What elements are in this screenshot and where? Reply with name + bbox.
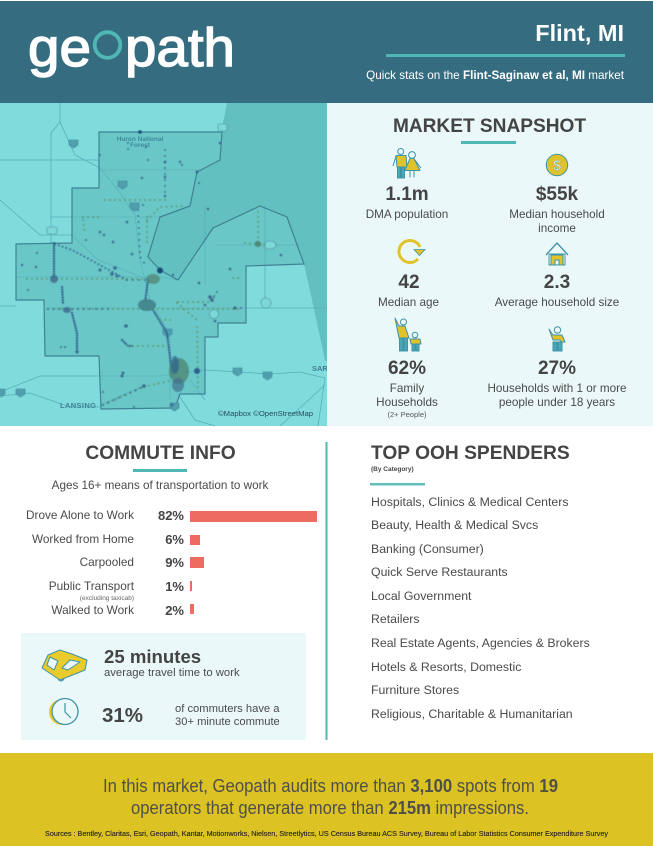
category list: Hotels & Resorts, Domestic — [371, 660, 521, 674]
map labels: SAR — [312, 364, 328, 373]
bar chart: 82% — [158, 508, 184, 523]
stat: family households: 62% — [388, 358, 426, 379]
stat: households with children: people under 18 years — [499, 396, 615, 409]
geopath logo: path — [125, 18, 235, 78]
geopath logo — [28, 18, 235, 78]
category list: Retailers — [371, 612, 420, 626]
stat: households with children: 27% — [538, 358, 576, 379]
stat: median age: 42 — [398, 272, 420, 293]
bar chart: 1% — [165, 579, 184, 594]
bar chart: 9% — [165, 555, 184, 570]
bar chart: Carpooled — [80, 555, 134, 569]
bar chart: (excluding taxicab) — [80, 595, 134, 602]
map labels: Forest — [130, 142, 151, 149]
map labels — [60, 136, 328, 418]
stat: median age — [378, 272, 439, 309]
stat: household size: Average household size — [495, 296, 619, 309]
subheading: Ages 16+ means of transportation to work — [52, 479, 268, 492]
stat: income: income — [538, 222, 576, 235]
map labels: ©Mapbox ©OpenStreetMap — [218, 409, 313, 418]
category list: Hospitals, Clinics & Medical Centers — [371, 495, 569, 509]
stat: income — [509, 184, 605, 235]
DMA region — [16, 132, 304, 409]
bar chart — [26, 508, 317, 618]
map labels: Huron National — [117, 136, 163, 143]
stat: income: Median household — [509, 208, 605, 221]
bar chart: 2% — [165, 603, 184, 618]
heading: TOP OOH SPENDERS — [371, 443, 570, 464]
icon: parent and child — [395, 318, 421, 351]
stat: population: DMA population — [366, 208, 448, 221]
stat: households with children: Households with 1 or more — [487, 382, 627, 395]
panel: market snapshot — [327, 103, 653, 426]
icon: couple — [393, 148, 421, 178]
category list: Beauty, Health & Medical Svcs — [371, 518, 538, 532]
map labels: LANSING — [60, 401, 96, 410]
bar chart: Drove Alone to Work — [26, 508, 134, 522]
icon: child — [549, 327, 565, 351]
bar chart: Public Transport — [49, 579, 135, 593]
icon: cycle arrow — [399, 240, 425, 262]
footer banner — [0, 753, 653, 846]
map panel — [0, 103, 328, 426]
icon: dollar coin — [546, 154, 568, 176]
long commute share: 30+ minute commute — [175, 716, 280, 728]
heading: COMMUTE INFO — [85, 443, 236, 464]
category list — [371, 495, 590, 721]
icon: dollar coin: $ — [553, 157, 561, 173]
audit summary — [103, 775, 558, 818]
long commute share — [102, 703, 280, 728]
stat: median age: Median age — [378, 296, 439, 309]
icon: house — [546, 243, 568, 265]
heading: MARKET SNAPSHOT — [393, 116, 586, 137]
category list: Banking (Consumer) — [371, 542, 484, 556]
stat: households with children — [487, 358, 627, 409]
stat: family households: (2+ People) — [388, 410, 427, 419]
panel: commute info — [21, 443, 317, 740]
market name: Flint, MI — [535, 20, 624, 46]
panel: top OOH spenders — [370, 443, 590, 721]
stat: population: 1.1m — [385, 184, 429, 205]
stat: household size: 2.3 — [544, 272, 570, 293]
stat: family households: Family — [390, 382, 424, 395]
stat: family households: Households — [376, 396, 438, 409]
traffic dots — [27, 143, 265, 405]
long commute share: 31% — [102, 704, 143, 727]
icon: car — [42, 650, 87, 681]
stat: population — [366, 184, 448, 221]
sources: Sources : Bentley, Claritas, Esri, Geopath, Kantar, Motionworks, Nielsen, Streetlytics, US Census Bureau ACS Survey, Bureau of Labor Statistics Consumer Expenditure Survey — [45, 831, 609, 838]
audit summary: In this market, Geopath audits more than 3,100 spots from 19 — [103, 775, 558, 796]
header banner — [0, 1, 653, 103]
commute stats box — [21, 633, 306, 740]
category list: Quick Serve Restaurants — [371, 565, 508, 579]
audit summary: operators that generate more than 215m impressions. — [131, 797, 529, 818]
category list: Furniture Stores — [371, 683, 459, 697]
icon: clock — [49, 698, 78, 725]
category list: Local Government — [371, 589, 472, 603]
bar chart: Walked to Work — [51, 603, 134, 617]
highway shields — [0, 124, 276, 411]
city clusters — [50, 130, 261, 392]
travel time: average travel time to work — [104, 667, 240, 679]
category list: Real Estate Agents, Agencies & Brokers — [371, 636, 590, 650]
long commute share: of commuters have a — [175, 703, 280, 715]
travel time: 25 minutes — [104, 646, 201, 667]
bar chart: Worked from Home — [32, 532, 134, 546]
geopath logo: ge — [28, 18, 91, 78]
stat: income: $55k — [536, 184, 579, 205]
stat: household size — [495, 272, 619, 309]
category list: Religious, Charitable & Humanitarian — [371, 707, 573, 721]
scattered dots — [21, 142, 282, 408]
travel time — [104, 646, 240, 679]
market subtitle: Quick stats on the Flint-Saginaw et al, MI market — [366, 69, 625, 82]
panel: top OOH spenders: (By Category) — [371, 466, 414, 473]
bar chart: 6% — [165, 532, 184, 547]
roads — [0, 103, 327, 426]
water: Lake Huron and Saginaw Bay — [148, 103, 327, 362]
stat: family households — [376, 358, 438, 419]
